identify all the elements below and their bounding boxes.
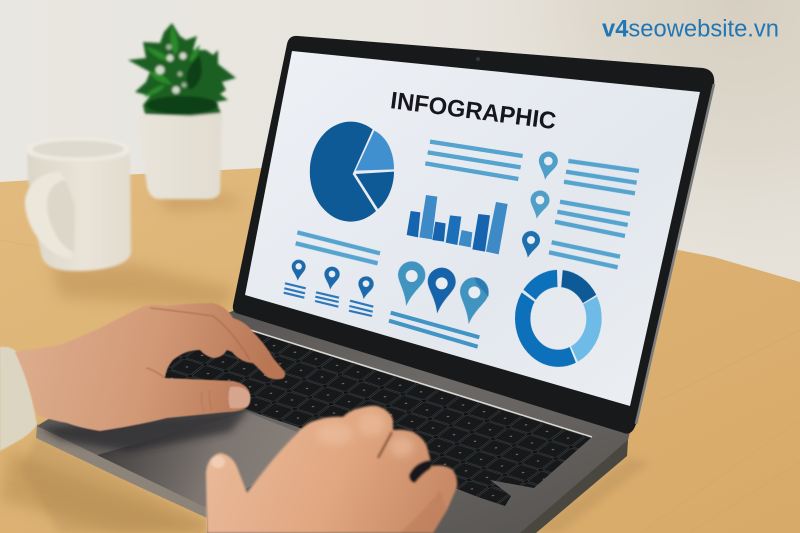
desk surface [0,168,800,533]
left hand [15,303,285,431]
watermark: v4seowebsite.vn: v4seowebsite.vn [602,16,779,42]
right thumb and palm [206,406,457,533]
pin 1 with text lines [536,150,639,193]
right knuckle highlights [317,412,414,457]
left thumb nail [228,387,250,408]
screen [245,51,700,406]
foliage [128,23,236,116]
coffee mug [25,138,131,271]
keyboard silver edge [247,329,592,437]
trackpad [97,412,297,508]
potted plant [128,23,236,199]
laptop base [20,310,650,533]
infographic title: INFOGRAPHIC [389,87,558,135]
desk shadows [0,194,245,533]
base side edge [36,424,207,518]
pin 3 with text lines [519,230,620,267]
mug body [27,152,131,271]
pin 2 with text lines [527,189,630,236]
left sleeve [0,347,37,451]
small pin group 2 [315,266,341,307]
right hand [206,406,457,533]
right thumb tip highlight [211,456,225,468]
plant pot [138,113,222,199]
large pin centre [423,266,457,315]
base front right edge [520,440,628,533]
left finger shading [146,308,250,378]
base deck [37,310,630,533]
screen content: infographic [284,87,639,358]
laptop lid [233,36,714,434]
mug rim [27,138,129,160]
pie chart [310,122,394,222]
desk wood grain [0,240,800,533]
keyboard [160,329,592,506]
base shadow on desk [20,436,650,533]
large pin left [393,259,427,308]
foliage bright spots [156,44,186,94]
hand shadow on deck [40,408,250,452]
small pin group 1 [284,259,306,298]
left thumb knuckle creases [201,390,212,411]
ring or dark key between fingers [409,460,432,483]
text lines: top centre [425,142,523,179]
right finger gaps [378,432,392,458]
mug inside [32,140,124,158]
left hand palm and fingers [15,303,285,431]
mug handle [25,172,73,258]
bar chart [407,195,508,254]
mug handle shadow [47,180,75,255]
donut chart [523,278,594,358]
text lines: left [296,232,380,263]
right lower shading [400,490,447,533]
lid metal edge [636,84,714,424]
small pin group 3 [349,275,375,316]
lid frame [233,36,714,434]
webcam [476,57,480,61]
text lines: below pins [389,313,479,347]
large pin right [454,275,491,327]
